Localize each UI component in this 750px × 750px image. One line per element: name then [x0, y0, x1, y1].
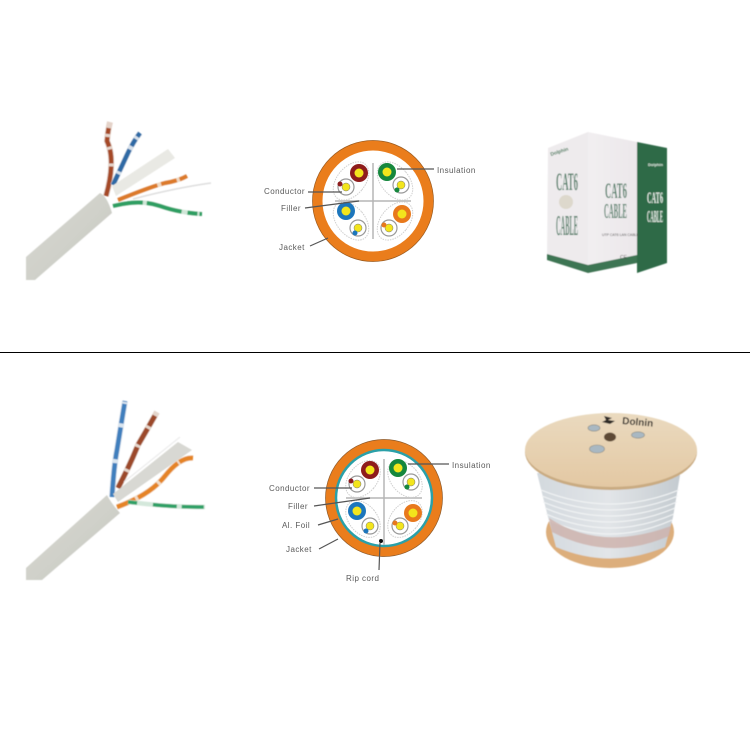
- product box: CAT6: [547, 132, 667, 273]
- blue twisted pair: [113, 133, 140, 185]
- box front text: CE: [620, 255, 628, 261]
- product box: CAT6: CAT6: [556, 169, 578, 196]
- spool brand: Dolnin: [622, 416, 654, 430]
- box green side: [637, 142, 667, 273]
- label: Jacket: Jacket: [279, 243, 305, 252]
- brown twisted pair: [118, 412, 157, 488]
- label: Conductor: Conductor: [264, 187, 305, 196]
- label: Rip cord: Rip cord: [346, 574, 379, 583]
- insulated conductors: [337, 163, 411, 223]
- rip cord dot: [379, 539, 383, 543]
- foil ring: [336, 450, 432, 546]
- striped conductors: [338, 177, 409, 236]
- label: Filler: Filler: [288, 502, 308, 511]
- pair shields: [326, 155, 420, 247]
- cross-section diagram: top: [264, 140, 476, 262]
- top flange rim: [525, 414, 697, 490]
- cable coil: [537, 473, 680, 558]
- bottom flange: [546, 496, 674, 568]
- orange twisted pair: [118, 176, 187, 200]
- white separator strip: [112, 149, 175, 196]
- product box: CAT6: CABLE: [556, 211, 578, 242]
- insulated conductors: [348, 459, 422, 522]
- bolts: [588, 425, 644, 453]
- box front text: UTP CAT6 LAN CABLE: [602, 233, 639, 237]
- product box: CAT6: CABLE: [604, 199, 627, 223]
- text: CABLE: [647, 207, 663, 226]
- box front face: [588, 132, 637, 273]
- cable spool: [525, 413, 697, 568]
- jacket ring: [330, 444, 438, 552]
- cable jacket: [26, 193, 112, 280]
- box side text: Dolphin: [648, 162, 663, 167]
- top flange: [525, 413, 697, 487]
- orange twisted pair: [117, 458, 193, 507]
- coil winding lines: [541, 490, 679, 534]
- box brand: Dolphin: [550, 146, 569, 158]
- divider line: [0, 352, 750, 353]
- label: Filler: Filler: [281, 204, 301, 213]
- label: Jacket: Jacket: [286, 545, 312, 554]
- filler cross: [346, 459, 422, 545]
- label: Al. Foil: Al. Foil: [282, 521, 310, 530]
- box front text: [602, 178, 639, 261]
- white thin cord: [133, 183, 211, 199]
- pair shields: [339, 454, 429, 544]
- leader lines: [314, 464, 449, 570]
- green twisted pair: [128, 502, 205, 507]
- box left text: [556, 169, 578, 242]
- jacket ring: [318, 146, 428, 256]
- green twisted pair: [113, 202, 202, 214]
- label: Conductor: Conductor: [269, 484, 310, 493]
- label: Insulation: Insulation: [437, 166, 476, 175]
- box front text: CAT6: [605, 178, 627, 203]
- leader lines: [305, 169, 434, 246]
- text: CAT6: [647, 190, 663, 207]
- grey separator strip: [113, 442, 192, 502]
- striped conductors: [348, 474, 419, 534]
- cable photo: bottom: [26, 401, 205, 580]
- brown twisted pair: [106, 122, 111, 196]
- label: Insulation: Insulation: [452, 461, 491, 470]
- box left face: [547, 132, 588, 273]
- pink wrap band: [549, 518, 671, 548]
- cable jacket: [26, 495, 120, 580]
- filler cross: [335, 163, 411, 239]
- centre hole: [604, 432, 616, 442]
- cable photo: top: [26, 122, 211, 280]
- box green base strip: [547, 254, 588, 273]
- blue twisted pair: [112, 401, 125, 497]
- cross-section diagram: bottom: [269, 440, 491, 583]
- box side text: [647, 162, 663, 226]
